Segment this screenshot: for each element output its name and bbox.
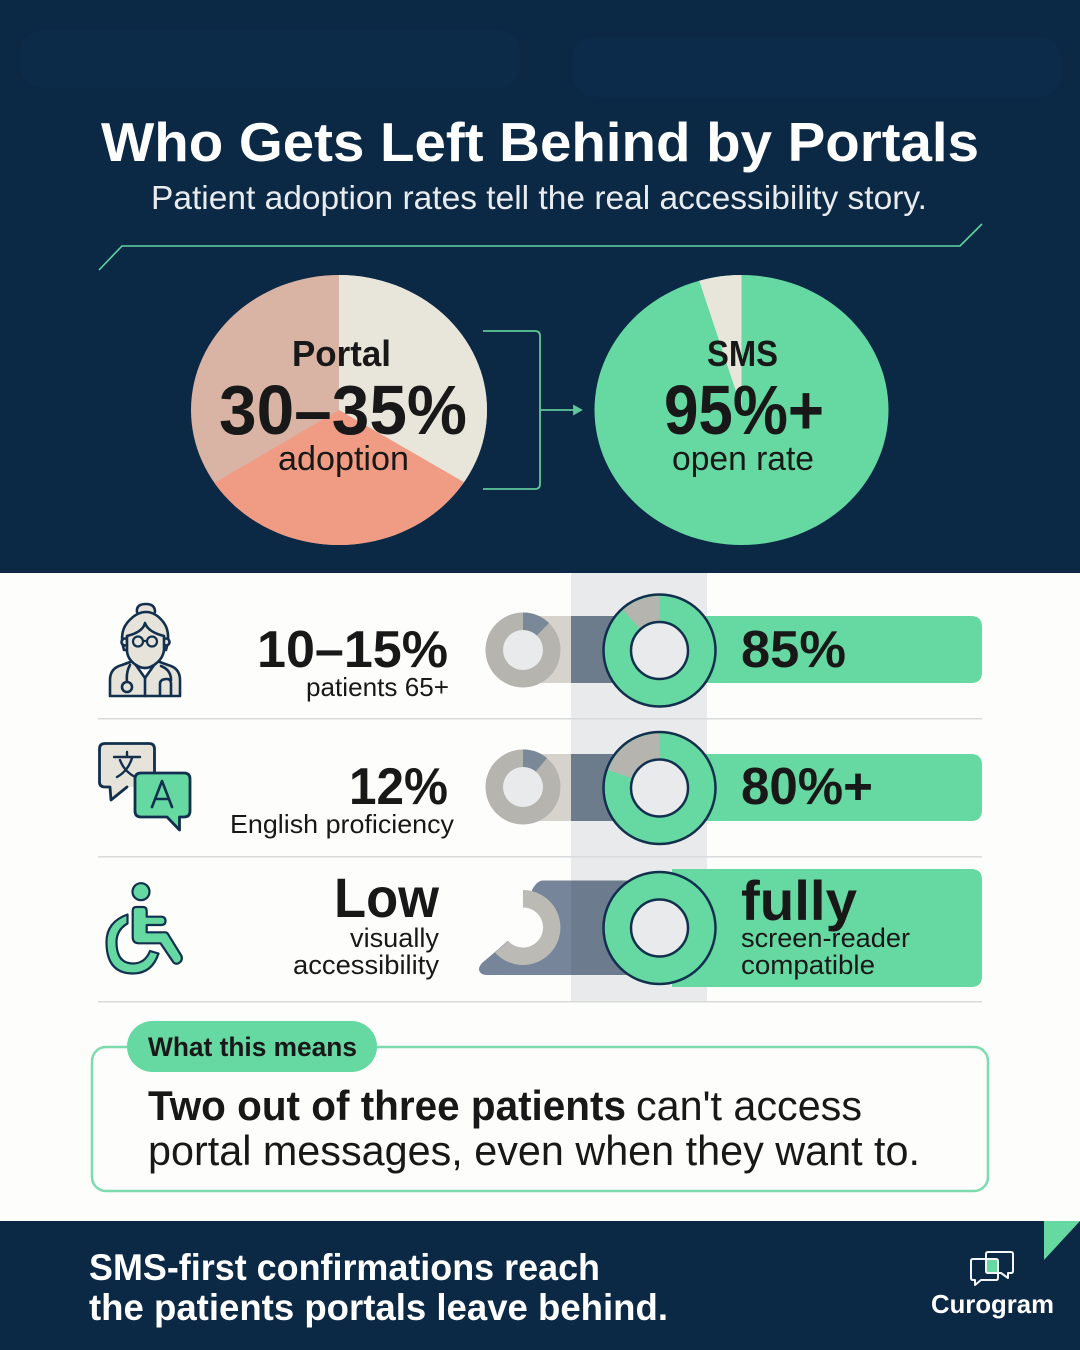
label: SMS: SMS bbox=[707, 333, 778, 374]
label: Portal: Portal bbox=[292, 333, 391, 374]
panel: footer bbox=[0, 1221, 1080, 1350]
icon: translation bubbles bbox=[100, 744, 190, 830]
number: 12%: 12% bbox=[349, 758, 448, 816]
number: 95%+: 95%+ bbox=[664, 371, 824, 449]
row: visual accessibility bbox=[106, 866, 982, 987]
label: screen-reader: screen-reader bbox=[741, 923, 910, 953]
row: patients 65+ bbox=[110, 594, 982, 706]
tag: What this means: What this means bbox=[148, 1032, 357, 1062]
icon: wheelchair bbox=[106, 883, 182, 974]
label: English proficiency: English proficiency bbox=[230, 809, 454, 839]
title: Who Gets Left Behind by Portals bbox=[101, 111, 979, 173]
label: adoption: adoption bbox=[278, 440, 409, 478]
subtitle: Patient adoption rates tell the real accessibility story. bbox=[151, 179, 927, 216]
icon: older patient bbox=[110, 604, 180, 696]
number: 80%+: 80%+ bbox=[741, 758, 873, 816]
center comparison band bbox=[571, 573, 707, 1002]
bar: SMS green bbox=[604, 594, 982, 706]
tag: What this means bbox=[127, 1021, 377, 1072]
corner accent bbox=[1044, 1221, 1080, 1260]
footer message bbox=[89, 1247, 668, 1328]
callout: what this means bbox=[92, 1021, 988, 1191]
chart: portal pie bbox=[191, 275, 487, 545]
panel: header bbox=[0, 0, 1080, 573]
bar: portal grey bbox=[479, 880, 641, 975]
number: Low: Low bbox=[334, 866, 439, 929]
bar: SMS green bbox=[604, 732, 982, 844]
bar: portal grey bbox=[486, 749, 631, 824]
label: open rate: open rate bbox=[672, 440, 814, 478]
footer message: the patients portals leave behind. bbox=[89, 1287, 668, 1328]
footer message: SMS-first confirmations reach bbox=[89, 1247, 600, 1288]
number: fully: fully bbox=[741, 869, 857, 932]
label: compatible: compatible bbox=[741, 950, 875, 980]
label: patients 65+: patients 65+ bbox=[306, 672, 449, 702]
bar: portal grey bbox=[486, 612, 631, 688]
callout text: portal messages, even when they want to. bbox=[148, 1127, 920, 1174]
label: accessibility: accessibility bbox=[293, 950, 440, 980]
arrow: bracket to SMS bbox=[483, 331, 581, 489]
callout text: Two out of three patients bbox=[148, 1082, 626, 1129]
callout text: can't access bbox=[636, 1082, 862, 1129]
label: visually: visually bbox=[350, 923, 439, 953]
logo: Curogram bbox=[931, 1252, 1054, 1319]
row: English proficiency bbox=[100, 732, 982, 844]
bar: SMS green bbox=[604, 869, 982, 987]
number: 10-15%: 10–15% bbox=[257, 621, 448, 679]
number: 85%: 85% bbox=[741, 621, 846, 679]
chart: SMS pie bbox=[594, 265, 888, 545]
logo: Curogram: Curogram bbox=[931, 1289, 1054, 1319]
number: 30-35%: 30–35% bbox=[219, 371, 467, 449]
callout text bbox=[148, 1082, 920, 1174]
